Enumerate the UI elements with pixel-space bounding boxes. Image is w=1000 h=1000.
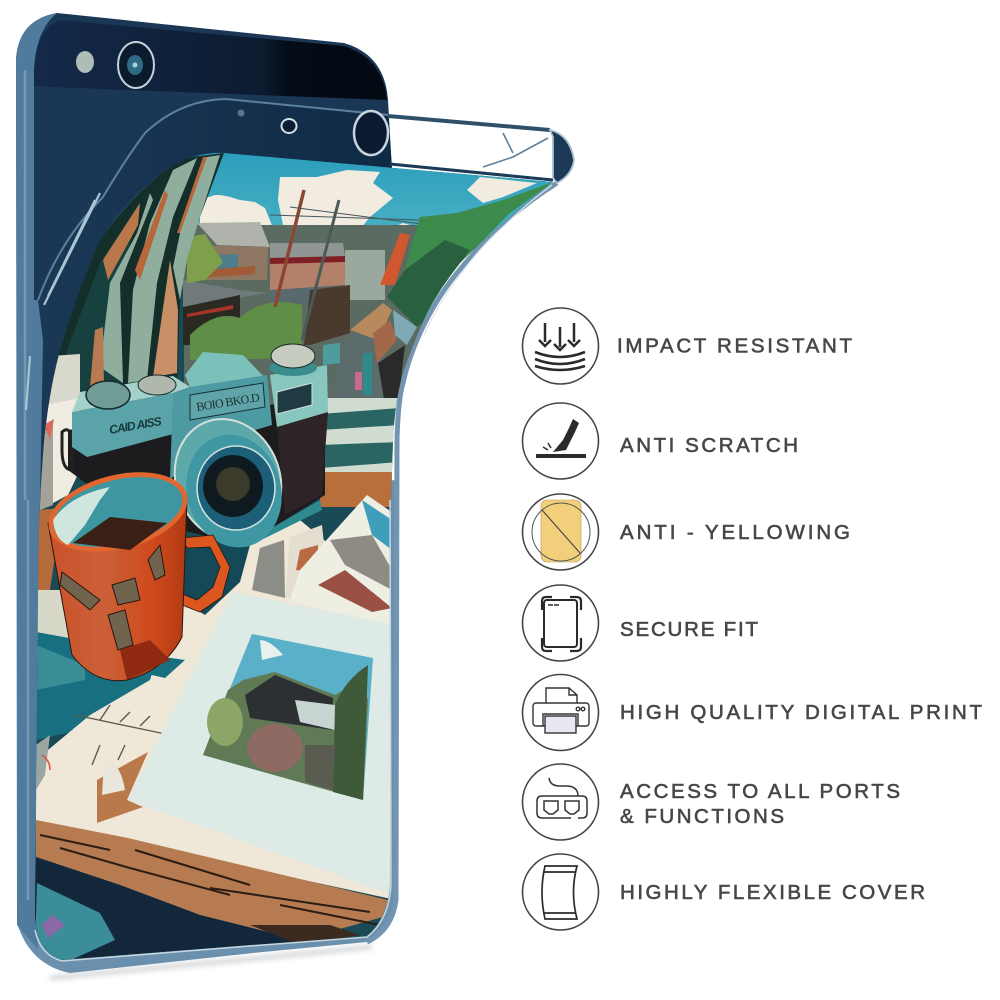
feature: high quality digital print <box>522 674 982 750</box>
large photo print <box>128 592 396 896</box>
sky <box>190 150 560 260</box>
steps and wooden table <box>320 398 400 507</box>
label: ACCESS TO ALL PORTS <box>620 780 900 803</box>
roadside sign <box>380 233 410 285</box>
phone body behind the case <box>16 13 392 500</box>
camera dials <box>86 381 130 409</box>
feature: secure fit <box>522 585 758 661</box>
icon: impact arrows <box>522 308 598 384</box>
icon: ethernet ports <box>522 764 598 840</box>
feature: impact resistant <box>522 308 852 384</box>
transparent case shell <box>16 13 574 973</box>
icon: bent cover <box>522 854 598 930</box>
camera body: CAID AISS <box>108 414 163 437</box>
street buildings <box>183 190 430 415</box>
label: SECURE FIT <box>620 618 758 641</box>
case camera cutout <box>354 111 388 155</box>
icon: phone camera lens <box>118 42 154 88</box>
coffee mug <box>40 459 230 681</box>
brown envelope <box>97 752 148 823</box>
feature: anti yellowing <box>522 494 850 570</box>
feature: access to all ports and functions <box>522 764 900 840</box>
label: ANTI - YELLOWING <box>620 521 850 544</box>
case side buttons <box>26 193 100 410</box>
top opening strokes <box>388 116 550 130</box>
feature: highly flexible cover <box>522 854 925 930</box>
right edge of case <box>367 183 557 942</box>
icon: blade on surface <box>522 403 598 479</box>
left frame <box>16 13 57 950</box>
right tip of the case <box>550 130 574 183</box>
table papers <box>36 520 396 900</box>
camera body: BOIO BKO.D <box>195 390 261 414</box>
case bottom shadow <box>50 947 372 978</box>
small photos at right <box>290 495 396 630</box>
icon: phone flash <box>76 51 94 73</box>
printed artwork on the case <box>30 140 560 970</box>
camera body <box>62 344 328 558</box>
icon: yellow phone with prohibited sign <box>522 494 598 570</box>
tablet in corner <box>35 883 115 965</box>
top-left edge of case <box>38 99 388 300</box>
label: ANTI SCRATCH <box>620 434 798 457</box>
wooden edge <box>36 820 390 940</box>
wooden arch <box>40 153 224 420</box>
camera lens <box>174 418 282 548</box>
left jar and notes <box>38 354 80 590</box>
label: & FUNCTIONS <box>620 805 784 828</box>
label: IMPACT RESISTANT <box>617 334 852 358</box>
camera viewfinder window <box>277 383 312 414</box>
feature: anti scratch <box>522 403 798 479</box>
case lower edge highlight <box>35 500 391 961</box>
icon: printer <box>522 674 598 750</box>
trees at right <box>387 182 553 327</box>
label <box>620 780 900 828</box>
icon: phone with corner bumpers <box>522 585 598 661</box>
label: HIGHLY FLEXIBLE COVER <box>620 881 925 904</box>
label: HIGH QUALITY DIGITAL PRINT <box>620 701 982 724</box>
case flash cutout <box>282 119 296 133</box>
camera nameplate <box>190 383 265 420</box>
